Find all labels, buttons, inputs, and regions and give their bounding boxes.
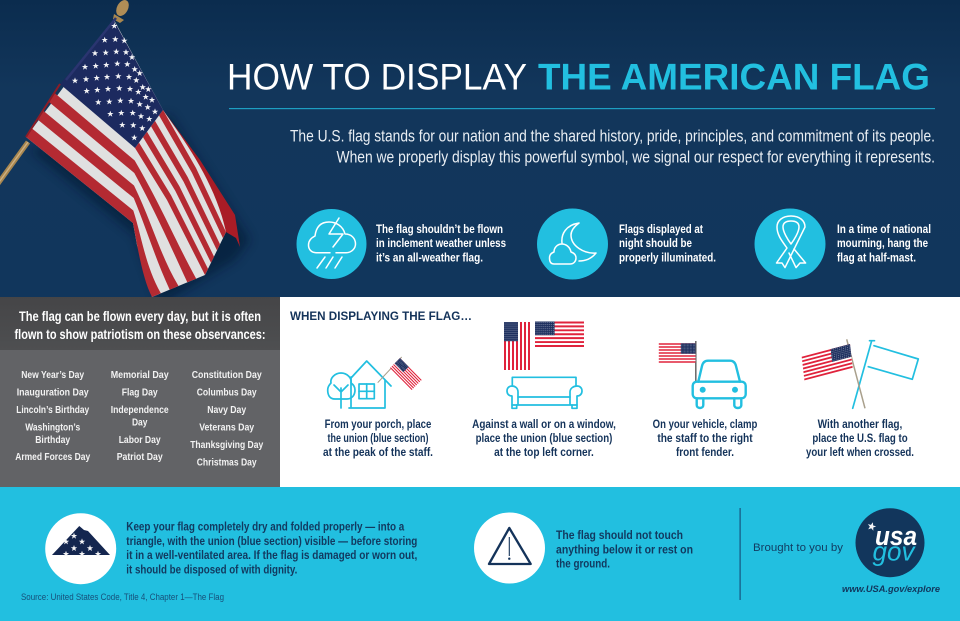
- list: second column of days: [111, 370, 169, 463]
- tip: half-mast: flag at half-mast.: [837, 252, 916, 264]
- list: third column of days: Veterans Day: [199, 422, 255, 434]
- list: second column of days: Independence: [111, 405, 169, 416]
- item: crossed flags: your left when crossed.: [806, 447, 914, 459]
- item: wall or window: [472, 322, 616, 459]
- section heading: WHEN DISPLAYING THE FLAG…: [290, 311, 472, 323]
- list: first column of days: Washington’s: [25, 422, 81, 434]
- observances heading: [14, 309, 266, 342]
- title: HOW TO DISPLAY: [227, 56, 527, 98]
- title: [227, 56, 930, 98]
- storage text: it should be disposed of with dignity.: [126, 564, 297, 576]
- ground warning text: [556, 530, 693, 571]
- icon: moon and cloud: [537, 208, 608, 280]
- icon: blank crossed flag: [853, 341, 918, 408]
- item: porch: From your porch, place: [325, 419, 431, 431]
- tip: half-mast: mourning, hang the: [837, 238, 928, 250]
- ground warning text: the ground.: [556, 559, 610, 571]
- list: third column of days: Christmas Day: [197, 458, 257, 468]
- icon: porch flag: [378, 357, 422, 390]
- observances heading: The flag can be flown every day, but it is often: [19, 309, 261, 324]
- icon: horizontal wall flag: [535, 322, 584, 347]
- list: second column of days: Flag Day: [122, 388, 158, 398]
- storage text: Keep your flag completely dry and folded properly — into a: [126, 522, 405, 534]
- icon: warning triangle: [474, 512, 545, 584]
- icon: storm cloud: [296, 209, 366, 279]
- icon: mourning ribbon: [754, 208, 826, 280]
- list: third column of days: [190, 370, 264, 468]
- list: first column of days: Inauguration Day: [17, 388, 89, 398]
- item: crossed flags: [802, 339, 918, 459]
- observances heading: flown to show patriotism on these observances:: [14, 327, 266, 342]
- icon: large waving American flag: [0, 0, 250, 305]
- storage text: [126, 522, 417, 576]
- intro text: [290, 126, 935, 166]
- header panel background: [0, 0, 960, 297]
- list: third column of days: Thanksgiving Day: [190, 440, 264, 451]
- tip: inclement weather: The flag shouldn’t be flown: [376, 224, 503, 236]
- tip: inclement weather: it’s an all-weather flag.: [376, 252, 483, 264]
- ground warning text: anything below it or rest on: [556, 544, 693, 556]
- storage text: it in a well-ventilated area. If the flag is damaged or worn out,: [126, 550, 417, 562]
- item: wall or window: Against a wall or on a window,: [472, 419, 616, 431]
- list: third column of days: Navy Day: [207, 405, 247, 416]
- list: second column of days: Labor Day: [119, 435, 161, 446]
- item: vehicle: front fender.: [676, 447, 734, 459]
- logo: USA gov: [856, 508, 924, 577]
- ground warning text: The flag should not touch: [556, 530, 683, 542]
- panel: when displaying the flag: [280, 297, 960, 487]
- list: first column of days: Armed Forces Day: [15, 452, 91, 463]
- list: first column of days: [15, 370, 91, 463]
- list: second column of days: Memorial Day: [111, 370, 169, 381]
- item: vehicle: [653, 341, 757, 459]
- icon: sofa: [507, 377, 582, 408]
- tip: night illumination: Flags displayed at: [619, 224, 703, 236]
- logo: USA gov: usa: [875, 521, 917, 551]
- panel: observances: [0, 297, 280, 487]
- tip: night illumination: properly illuminated.: [619, 252, 716, 264]
- panel: footer: [0, 487, 960, 621]
- title: THE AMERICAN FLAG: [538, 56, 930, 98]
- list: third column of days: Columbus Day: [197, 388, 257, 398]
- list: first column of days: Lincoln’s Birthday: [16, 405, 90, 416]
- icon: vehicle flag: [659, 341, 696, 382]
- item: vehicle: the staff to the right: [657, 433, 753, 445]
- credit text: Brought to you by: [753, 542, 844, 554]
- tip: night illumination: [537, 208, 716, 280]
- item: vehicle: On your vehicle, clamp: [653, 419, 757, 431]
- item: porch: [323, 357, 433, 459]
- list: third column of days: Constitution Day: [192, 370, 262, 381]
- tip: half-mast: In a time of national: [837, 224, 931, 236]
- icon: house and tree: [328, 361, 391, 408]
- website link text: www.USA.gov/explore: [842, 584, 941, 595]
- icon: vertical wall flag: [504, 322, 530, 370]
- source note: Source: United States Code, Title 4, Chapter 1—The Flag: [21, 592, 224, 602]
- tip: inclement weather: [296, 209, 506, 279]
- icon: U.S. crossed flag: [802, 339, 865, 408]
- tip: night illumination: night should be: [619, 238, 692, 250]
- item: crossed flags: place the U.S. flag to: [812, 433, 908, 445]
- list: second column of days: Patriot Day: [117, 452, 163, 463]
- item: wall or window: place the union (blue section): [476, 433, 612, 445]
- list: first column of days: New Year’s Day: [21, 370, 85, 381]
- list: first column of days: Birthday: [35, 435, 71, 446]
- item: crossed flags: With another flag,: [818, 419, 902, 431]
- icon: car: [693, 361, 746, 408]
- tip: half-mast: [754, 208, 931, 280]
- logo: USA gov: gov: [872, 536, 916, 566]
- icon: folded flag: [45, 513, 116, 584]
- list: second column of days: Day: [132, 418, 148, 428]
- item: wall or window: at the top left corner.: [494, 447, 594, 459]
- tip: inclement weather: in inclement weather unless: [376, 238, 506, 250]
- item: porch: at the peak of the staff.: [323, 447, 433, 459]
- storage text: triangle, with the union (blue section) visible — before storing: [126, 536, 417, 548]
- item: porch: the union (blue section): [328, 433, 429, 445]
